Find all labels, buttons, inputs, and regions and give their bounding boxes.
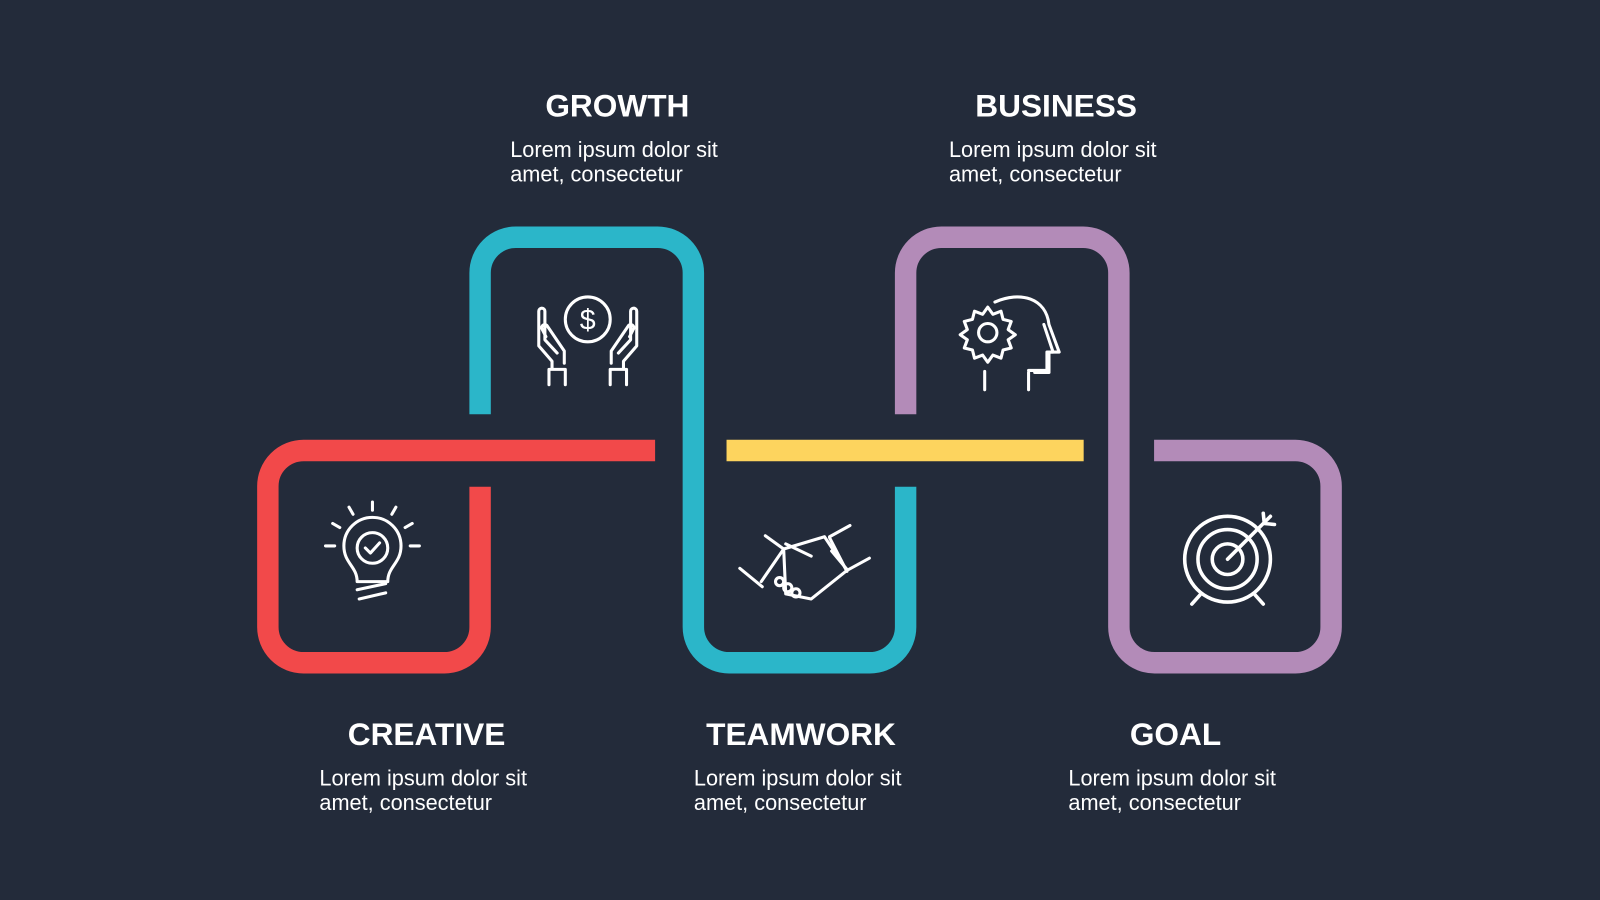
icon: money hands [539, 297, 637, 385]
icon: money hands: $ [580, 305, 596, 337]
icon: handshake [740, 526, 869, 599]
icon: lightbulb [326, 502, 419, 599]
path: business/goal (purple) [906, 237, 1331, 663]
heading: teamwork: Lorem ipsum dolor sit [694, 766, 902, 791]
heading: creative: Lorem ipsum dolor sit [319, 766, 527, 791]
heading: business [949, 87, 1157, 187]
path: growth/teamwork (teal) [480, 237, 906, 663]
heading: creative [319, 716, 527, 815]
icon: head with gear [960, 297, 1059, 390]
heading: goal: Lorem ipsum dolor sit [1068, 766, 1276, 791]
heading: goal: GOAL [1130, 716, 1221, 752]
heading: business: Lorem ipsum dolor sit [949, 137, 1157, 162]
path: connector (yellow) [727, 440, 1084, 461]
heading: teamwork [694, 716, 902, 815]
heading: creative: CREATIVE [348, 716, 505, 752]
heading: business: amet, consectetur [949, 162, 1122, 187]
heading: goal [1068, 716, 1276, 815]
heading: creative: amet, consectetur [319, 790, 492, 815]
heading: goal: amet, consectetur [1068, 790, 1241, 815]
heading: growth [510, 87, 718, 187]
icon: target [1185, 513, 1274, 604]
heading: teamwork: amet, consectetur [694, 790, 867, 815]
heading: growth: Lorem ipsum dolor sit [510, 137, 718, 162]
heading: growth: GROWTH [545, 87, 689, 123]
heading: growth: amet, consectetur [510, 162, 683, 187]
heading: business: BUSINESS [975, 87, 1137, 123]
path: creative (red) [268, 451, 655, 663]
heading: teamwork: TEAMWORK [706, 716, 896, 752]
